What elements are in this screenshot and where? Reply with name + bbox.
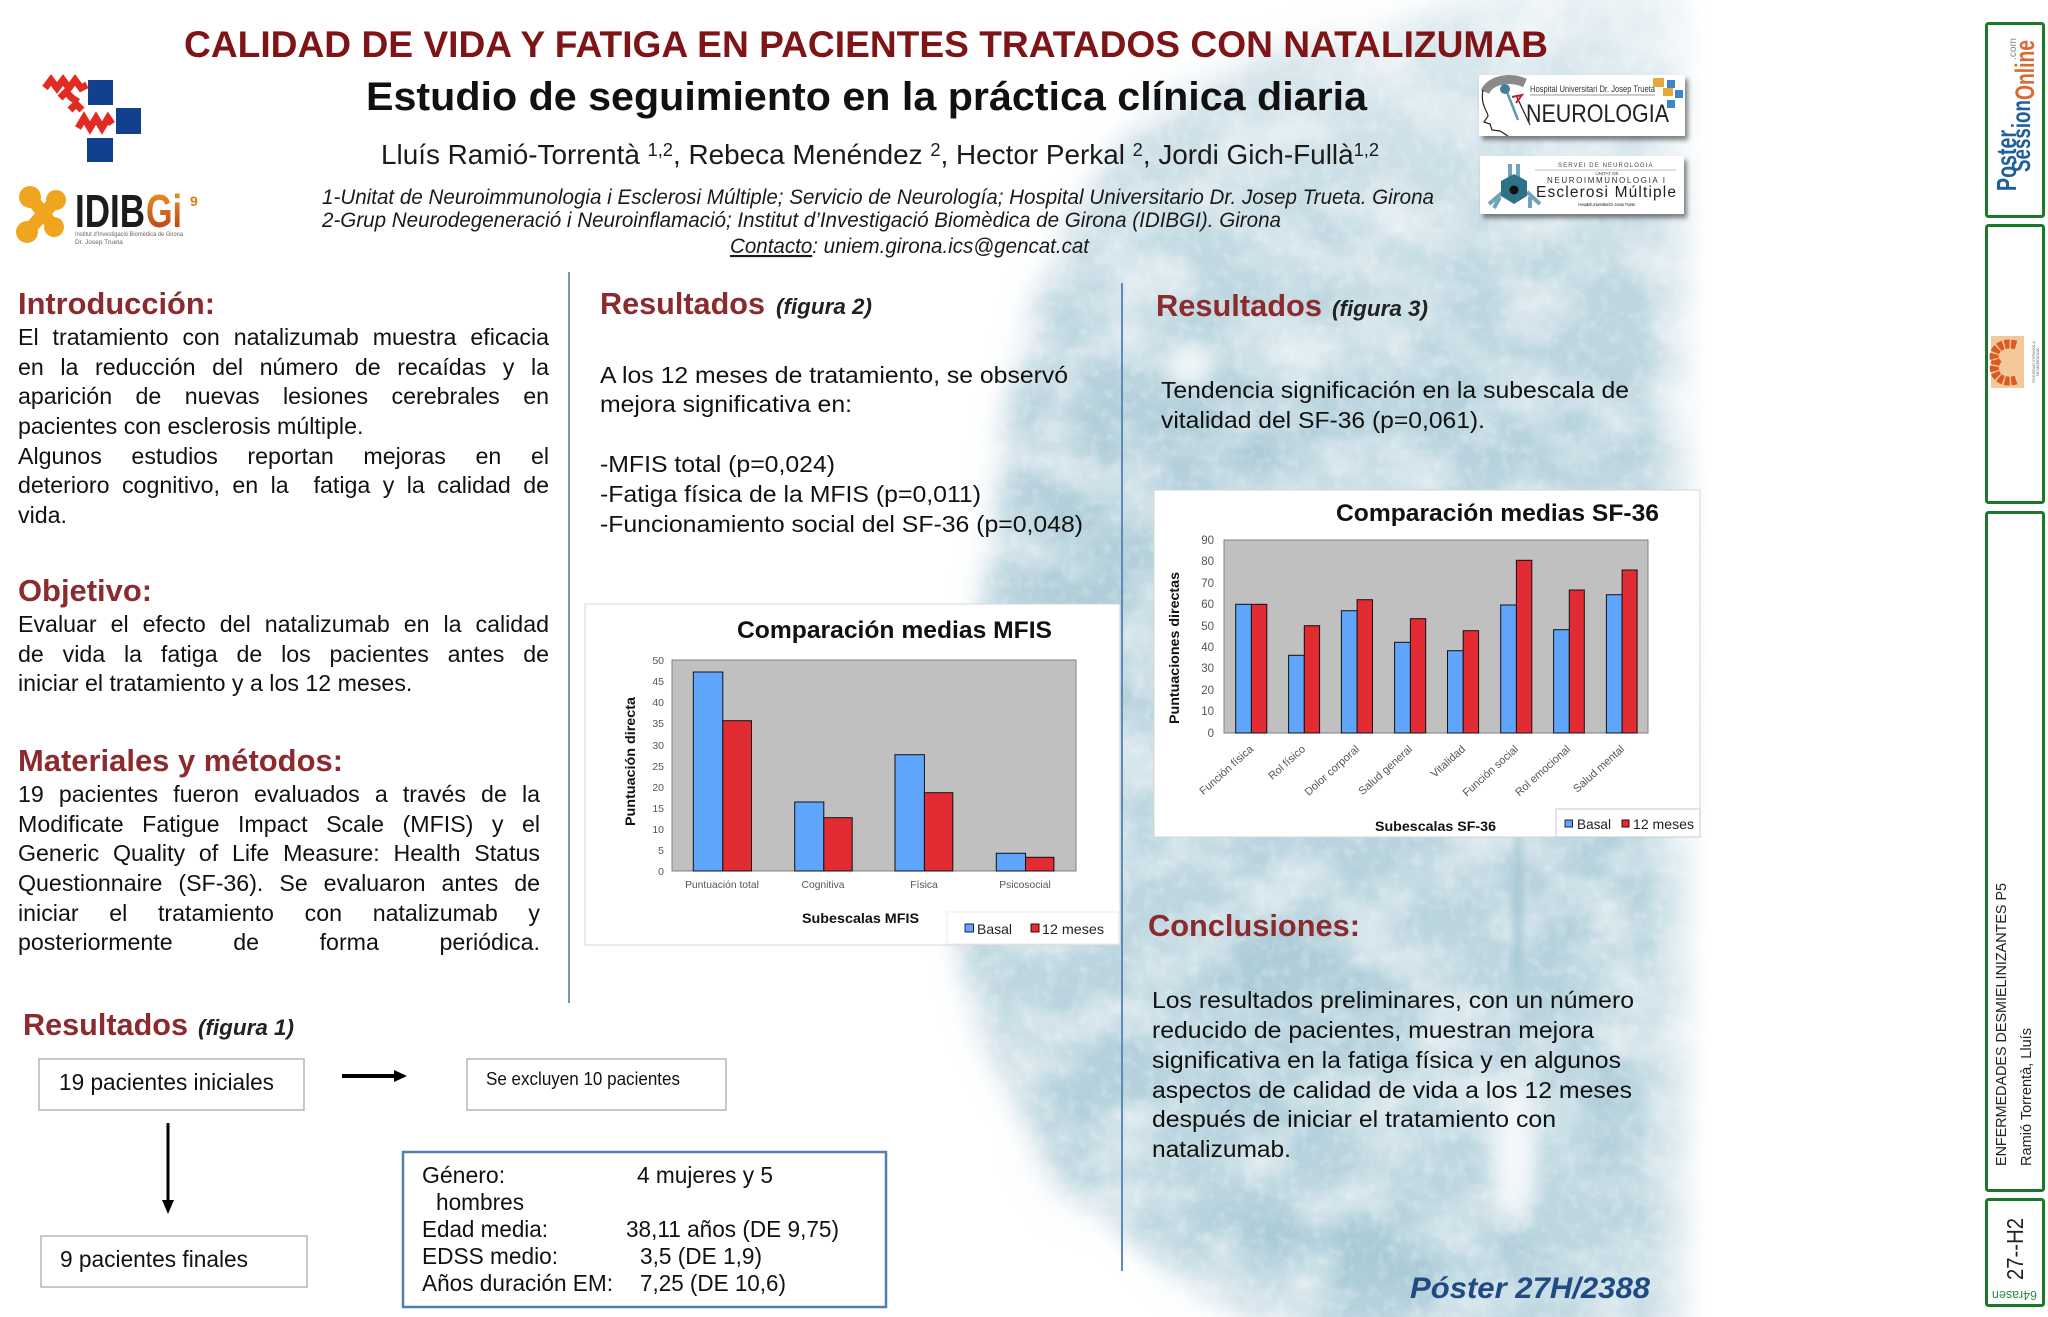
authors: , Rebeca Menéndez — [673, 139, 930, 170]
chart: comparación medias MFIS: Psicosocial — [999, 880, 1051, 891]
chart: comparación medias SF-36: Rol emocional — [1513, 743, 1573, 799]
logo: Neuroimmunologia i Esclerosi Múltiple: NEUROIMMUNOLOGIA I — [1547, 176, 1665, 185]
logo: hospital red and blue cross — [45, 80, 141, 162]
heading: resultados figura 1: (figura 1) — [198, 1015, 294, 1040]
affiliations and contact: Contacto: uniem.girona.ics@gencat.cat — [730, 235, 1090, 258]
text: resultados figura 2 — [600, 362, 1083, 537]
arrow: to final — [162, 1123, 174, 1214]
logo: IDIBGi: IDIB — [75, 185, 145, 237]
chart: comparación medias SF-36: 12 meses — [1633, 816, 1694, 832]
chart: comparación medias SF-36: 60 — [1201, 599, 1214, 611]
heading: resultados figura 3 — [1156, 289, 1428, 323]
sidebar panel: section and author: ENFERMEDADES DESMIELINIZANTES P5 — [1993, 883, 2010, 1166]
text: introducción — [18, 324, 549, 528]
stats box — [403, 1152, 886, 1307]
arrow: to excluded — [342, 1070, 407, 1082]
sidebar panel: section and author — [1986, 512, 2044, 1190]
flow box: se excluyen: Se excluyen 10 pacientes — [486, 1068, 680, 1089]
chart: comparación medias SF-36: Basal — [1577, 816, 1611, 832]
stats box: 7,25 (DE 10,6) — [640, 1270, 786, 1296]
heading: resultados figura 2 — [600, 287, 872, 321]
chart: comparación medias SF-36: Puntuaciones directas — [1167, 572, 1182, 724]
chart: comparación medias SF-36: Salud mental — [1571, 743, 1627, 795]
chart: comparación medias MFIS: Puntuación total — [685, 880, 759, 891]
affiliations and contact: 2-Grup Neurodegeneració i Neuroinflamació; Institut d’Investigació Biomèdica de Girona (IDIBGI). Girona — [321, 209, 1281, 232]
logo: IDIBGi: 9 — [190, 193, 198, 209]
sidebar panel: session code: 64rasen — [1992, 1288, 2037, 1303]
chart: comparación medias MFIS: Subescalas MFIS — [802, 911, 919, 926]
heading: resultados figura 2: Resultados — [600, 287, 765, 321]
heading: resultados figura 3: Resultados — [1156, 289, 1322, 323]
heading: materiales y métodos: Materiales y métodos: — [18, 744, 343, 778]
chart: comparación medias SF-36: 10 — [1201, 706, 1214, 718]
logo: Neuroimmunologia i Esclerosi Múltiple — [1480, 156, 1684, 214]
stats box: EDSS medio: — [422, 1243, 558, 1269]
text: objetivo — [18, 611, 549, 696]
text: conclusiones: después de iniciar el tratamiento con — [1152, 1106, 1556, 1132]
chart: comparación medias SF-36: 70 — [1201, 578, 1214, 590]
logo: Neuroimmunologia i Esclerosi Múltiple: Hospital Universitari Dr. Josep Trueta — [1578, 202, 1635, 207]
logo: Neurología — [1479, 75, 1685, 136]
sidebar panel: PosterSessionOnline: Online — [2010, 40, 2040, 100]
text: introducción: aparición de nuevas lesiones cerebrales en — [18, 383, 549, 409]
text: resultados figura 3: Tendencia significación en la subescala de — [1161, 377, 1629, 403]
text: introducción: El tratamiento con natalizumab muestra eficacia — [18, 324, 549, 350]
chart: comparación medias MFIS: 35 — [652, 718, 664, 730]
chart: comparación medias MFIS: 12 meses — [1042, 921, 1104, 937]
text: materiales y métodos: Questionnaire (SF-36). Se evaluaron antes de — [18, 870, 540, 896]
sidebar panel: PosterSessionOnline — [1986, 24, 2044, 216]
sidebar panel: session code — [1986, 1200, 2044, 1306]
stats box: Edad media: — [422, 1216, 548, 1242]
chart: comparación medias MFIS: 5 — [658, 845, 664, 857]
chart: comparación medias SF-36: Vitalidad — [1429, 743, 1468, 780]
sidebar panel: PosterSessionOnline: .com — [2008, 38, 2019, 60]
chart: comparación medias MFIS: 50 — [652, 655, 664, 667]
chart: comparación medias SF-36: 90 — [1201, 535, 1214, 547]
chart: comparación medias MFIS: Comparación medias MFIS — [737, 617, 1052, 644]
heading: introducción: Introducción: — [18, 287, 215, 321]
logo: Neurología: NEUROLOGIA — [1526, 100, 1669, 128]
authors: 1,2 — [648, 140, 673, 160]
heading: resultados figura 2: (figura 2) — [776, 294, 872, 319]
logo: IDIBGi: Gi — [146, 185, 182, 237]
text: conclusiones: aspectos de calidad de vida a los 12 meses — [1152, 1077, 1632, 1103]
chart: comparación medias SF-36: Subescalas SF-36 — [1375, 819, 1497, 834]
chart: comparación medias MFIS: 30 — [652, 740, 664, 752]
stats box: 3,5 (DE 1,9) — [640, 1243, 762, 1269]
poster number: Póster 27H/2388 — [1410, 1272, 1650, 1305]
flow box: se excluyen — [467, 1059, 726, 1110]
chart: comparación medias SF-36: Salud general — [1357, 743, 1415, 798]
text: introducción: pacientes con esclerosis múltiple. — [18, 413, 363, 439]
text: objetivo: Evaluar el efecto del natalizumab en la calidad — [18, 611, 549, 637]
heading: objetivo: Objetivo: — [18, 574, 152, 608]
chart: comparación medias MFIS: 45 — [652, 676, 664, 688]
text: conclusiones: Los resultados preliminares, con un número — [1152, 987, 1634, 1013]
text: conclusiones — [1152, 987, 1634, 1162]
flow box: 9 pacientes finales — [41, 1236, 307, 1287]
chart: comparación medias MFIS: Basal — [977, 921, 1012, 937]
text: materiales y métodos: iniciar el tratamiento con natalizumab y — [18, 900, 540, 926]
logo: Neurología: Hospital Universitari Dr. Josep Trueta — [1530, 84, 1656, 95]
logo: IDIBGi — [16, 185, 198, 246]
title: CALIDAD DE VIDA Y FATIGA EN PACIENTES TRATADOS CON NATALIZUMAB — [184, 24, 1548, 65]
sidebar panel: sociedad de neurología: SOCIEDAD ESPAÑOLA — [2031, 341, 2036, 383]
stats box: hombres — [436, 1189, 524, 1215]
text: introducción: Algunos estudios reportan mejoras en el — [18, 443, 549, 469]
chart: comparación medias SF-36: 50 — [1201, 621, 1214, 633]
text: materiales y métodos: 19 pacientes fueron evaluados a través de la — [18, 781, 540, 807]
chart: comparación medias SF-36: Función física — [1198, 743, 1257, 798]
flow box: 19 pacientes iniciales: 19 pacientes iniciales — [59, 1069, 274, 1095]
chart: comparación medias SF-36 — [1154, 490, 1700, 837]
text: resultados figura 2: mejora significativa en: — [600, 391, 852, 417]
authors: 2 — [930, 140, 940, 160]
text: resultados figura 3: vitalidad del SF-36 (p=0,061). — [1161, 407, 1485, 433]
chart: comparación medias MFIS: 15 — [652, 803, 664, 815]
text: resultados figura 2: -Fatiga física de la MFIS (p=0,011) — [600, 481, 981, 507]
text: materiales y métodos — [18, 781, 540, 955]
text: objetivo: iniciar el tratamiento y a los 12 meses. — [18, 670, 412, 696]
logo: IDIBGi: Dr. Josep Trueta — [75, 239, 123, 246]
logo: Neuroimmunologia i Esclerosi Múltiple: UNITAT DE — [1595, 171, 1619, 176]
heading: conclusiones: Conclusiones: — [1148, 909, 1360, 943]
text: introducción: en la reducción del número de recaídas y la — [18, 354, 549, 380]
authors: , Jordi Gich-Fullà — [1143, 139, 1354, 170]
sidebar panel: sociedad de neurología — [1986, 226, 2044, 502]
heading: resultados figura 1 — [23, 1008, 294, 1042]
text: resultados figura 2: -Funcionamiento social del SF-36 (p=0,048) — [600, 511, 1083, 537]
text: conclusiones: significativa en la fatiga física y en algunos — [1152, 1047, 1621, 1073]
chart: comparación medias MFIS: Puntuación directa — [623, 696, 638, 826]
chart: comparación medias MFIS — [585, 604, 1120, 945]
text: conclusiones: natalizumab. — [1152, 1136, 1291, 1162]
chart: comparación medias MFIS: 25 — [652, 761, 664, 773]
authors: , Hector Perkal — [940, 139, 1133, 170]
text: objetivo: de vida la fatiga de los pacientes antes de — [18, 641, 549, 667]
text: resultados figura 2: A los 12 meses de tratamiento, se observó — [600, 362, 1068, 388]
text: materiales y métodos: Modificate Fatigue Impact Scale (MFIS) y el — [18, 811, 540, 837]
chart: comparación medias SF-36: Comparación medias SF-36 — [1336, 500, 1659, 527]
background: brain scan watermark — [880, 0, 1770, 1317]
sidebar panel: sociedad de neurología: DE NEUROLOGÍA — [2035, 348, 2040, 376]
chart: comparación medias MFIS: Física — [910, 880, 938, 891]
stats box: Género: — [422, 1162, 505, 1188]
text: resultados figura 2: -MFIS total (p=0,024) — [600, 451, 835, 477]
authors: 2 — [1133, 140, 1143, 160]
stats box: 4 mujeres y 5 — [637, 1162, 773, 1188]
chart: comparación medias MFIS: 10 — [652, 824, 664, 836]
flow box: 19 pacientes iniciales — [39, 1059, 304, 1110]
subtitle: Estudio de seguimiento en la práctica clínica diaria — [366, 75, 1368, 119]
affiliations and contact — [321, 186, 1434, 258]
text: introducción: deterioro cognitivo, en la fatiga y la calidad de — [18, 472, 549, 498]
stats box: 38,11 años (DE 9,75) — [626, 1216, 839, 1242]
chart: comparación medias MFIS: 40 — [652, 697, 664, 709]
flow box: 9 pacientes finales: 9 pacientes finales — [60, 1246, 248, 1272]
chart: comparación medias SF-36: 40 — [1201, 642, 1214, 654]
text: resultados figura 3 — [1161, 377, 1629, 433]
sidebar panel: session code: 27--H2 — [2002, 1218, 2028, 1280]
logo: Neuroimmunologia i Esclerosi Múltiple: Esclerosi Múltiple — [1536, 184, 1676, 201]
text: materiales y métodos: posteriormente de forma periódica. — [18, 929, 540, 955]
text: materiales y métodos: Generic Quality of Life Measure: Health Status — [18, 840, 540, 866]
sidebar panel: PosterSessionOnline: Session — [2006, 100, 2036, 172]
chart: comparación medias MFIS: 0 — [658, 866, 664, 878]
chart: comparación medias SF-36: Función social — [1461, 743, 1521, 799]
affiliations and contact: 1-Unitat de Neuroimmunologia i Esclerosi Múltiple; Servicio de Neurología; Hospital Universitario Dr. Josep Trueta. Girona — [322, 186, 1434, 209]
text: conclusiones: reducido de pacientes, muestran mejora — [1152, 1017, 1594, 1043]
heading: resultados figura 1: Resultados — [23, 1008, 188, 1042]
logo: IDIBGi: Institut d'Investigació Biomèdica de Girona — [75, 231, 183, 238]
logo: Neuroimmunologia i Esclerosi Múltiple: SERVEI DE NEUROLOGIA — [1558, 163, 1654, 169]
chart: comparación medias MFIS: Cognitiva — [802, 880, 845, 891]
authors: Lluís Ramió-Torrentà — [381, 139, 636, 170]
heading: resultados figura 3: (figura 3) — [1332, 296, 1428, 321]
sidebar panel: PosterSessionOnline: Poster — [1991, 130, 2022, 191]
authors: 1,2 — [1354, 140, 1379, 160]
chart: comparación medias MFIS: 20 — [652, 782, 664, 794]
stats box: Años duración EM: — [422, 1270, 613, 1296]
chart: comparación medias SF-36: 20 — [1201, 685, 1214, 697]
chart: comparación medias SF-36: 80 — [1201, 556, 1214, 568]
chart: comparación medias SF-36: 30 — [1201, 663, 1214, 675]
chart: comparación medias SF-36: Rol físico — [1266, 743, 1308, 783]
chart: comparación medias SF-36: Dolor corporal — [1303, 743, 1362, 798]
sidebar panel: section and author: Ramió Torrentà, Lluís — [2018, 1028, 2035, 1166]
text: introducción: vida. — [18, 502, 67, 528]
chart: comparación medias SF-36: 0 — [1208, 728, 1214, 740]
